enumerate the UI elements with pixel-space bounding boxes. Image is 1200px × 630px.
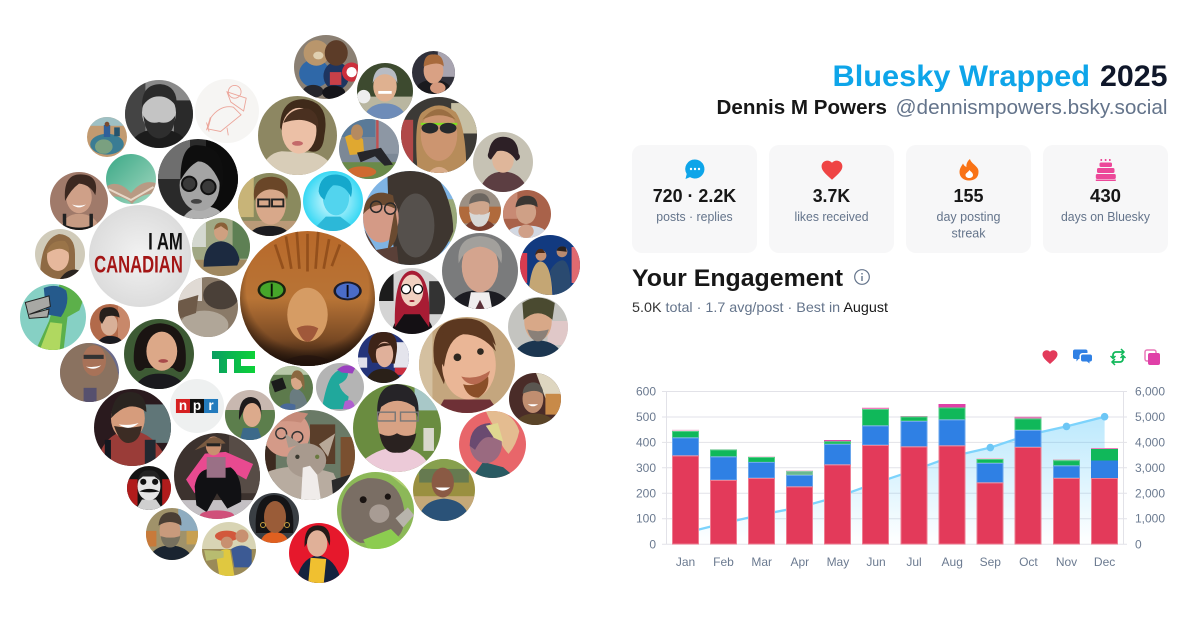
avatar: woman with pony (363, 171, 457, 265)
icon: reposts arrows (1110, 349, 1126, 365)
avatar: man with cat (265, 410, 355, 500)
subtitle: name and handle: Dennis M Powers (716, 97, 887, 119)
avatar: NPR logo: n (179, 398, 187, 413)
bar: Nov (1053, 459, 1080, 544)
avatar: red line sketch (195, 79, 259, 143)
bar: Sep (976, 458, 1004, 544)
avatar: open book (106, 154, 156, 204)
left axis labels: 600 (636, 384, 656, 398)
avatar: smiling woman with dark hair (50, 172, 108, 230)
month labels: Sep (980, 555, 1001, 569)
avatar: man with goatee making a face (419, 317, 515, 413)
avatar: illustrated woman smoking (459, 411, 526, 478)
bar: Dec (1091, 448, 1118, 544)
avatar: black and white mustache art (127, 466, 171, 510)
month labels: Oct (1019, 555, 1038, 569)
avatar: older man with white beard (459, 189, 501, 231)
right axis labels: 0 (1135, 537, 1142, 551)
panel: day posting streak: streak (952, 226, 986, 240)
bars: replies, likes, reposts, quotes by month (672, 404, 1118, 544)
avatar: man smiling outdoors in blue shirt (413, 459, 475, 521)
avatar: woman with brown curly hair (258, 96, 337, 175)
panel: likes received: likes received (794, 210, 869, 224)
icon: speech bubble (685, 159, 704, 179)
avatar: man with grey beard in classroom (146, 508, 198, 560)
avatar: big orange cat (240, 231, 375, 366)
avatar: woman in dark cloche hat (473, 132, 533, 192)
month labels (676, 555, 1115, 569)
bar: May (824, 440, 851, 544)
panel: days on Bluesky: 430 (1090, 186, 1121, 206)
avatar: older man in suit (442, 233, 518, 309)
panel: day posting streak: 155 (954, 186, 984, 206)
heading: Your Engagement: Your Engagement (632, 265, 843, 292)
left axis labels: 300 (636, 461, 656, 475)
right axis labels: 1,000 (1135, 512, 1165, 526)
avatar: woman with US flag background (358, 332, 409, 383)
avatar: woman on red background (289, 523, 349, 583)
bar: Oct (1014, 417, 1042, 544)
avatar: group photo with mushroom hat (202, 522, 256, 576)
bar: Feb (710, 449, 737, 544)
icon: replies bubbles (1073, 350, 1092, 364)
avatar: couple with US flags (520, 235, 580, 295)
cumulative area (686, 417, 1105, 544)
avatar: woman reading book in tree (269, 366, 313, 410)
avatar: blonde woman selfie (35, 229, 85, 279)
panel: posts and replies: 720 · 2.2K (653, 186, 736, 206)
title: 2025 (1100, 60, 1168, 93)
avatar: bearded man in greyscale (125, 80, 193, 148)
icon: likes heart (1042, 350, 1058, 364)
avatar: woman with glasses gold earrings (249, 493, 299, 543)
avatar: cyan cartoon portrait (303, 171, 363, 231)
avatar: woman with dark hair against foliage (124, 319, 194, 389)
avatar: man on deck (192, 218, 250, 276)
month labels: Dec (1094, 555, 1115, 569)
right axis labels: 4,000 (1135, 435, 1165, 449)
avatar: woman with glasses greyscale (158, 139, 238, 219)
panel: days on Bluesky (1043, 145, 1168, 253)
avatar: ginger man with hand on chin (412, 51, 455, 94)
avatar: person with glasses and brick wall (90, 304, 130, 344)
avatar: man thinking against brick (503, 190, 551, 238)
month labels: Jan (676, 555, 695, 569)
avatar: NPR logo (170, 379, 224, 433)
right axis labels (1135, 384, 1165, 551)
left axis labels: 0 (649, 537, 656, 551)
avatar: I AM CANADIAN (89, 205, 191, 307)
icon: cake (1096, 159, 1116, 181)
left axis labels: 400 (636, 435, 656, 449)
avatar: man in red hoodie (94, 389, 171, 466)
avatar: man in car smiling (509, 373, 561, 425)
month labels: Nov (1056, 555, 1077, 569)
avatar: wombat illustration (337, 472, 414, 549)
month labels: Apr (790, 555, 809, 569)
panel: likes received: 3.7K (813, 186, 850, 206)
avatar: smiling older man (357, 63, 413, 119)
left axis labels: 500 (636, 410, 656, 424)
avatar: blue dragon (20, 284, 86, 350)
right axis labels: 6,000 (1135, 384, 1165, 398)
right axis labels: 5,000 (1135, 410, 1165, 424)
avatar: woman in yellow sitting outdoors (339, 119, 399, 179)
avatar: teddy bears (294, 35, 358, 99)
title: Bluesky Wrapped (832, 60, 1090, 93)
avatar: woman with brown scarf (60, 343, 119, 402)
legend icons (1042, 349, 1160, 365)
panel: posts and replies: posts · replies (656, 210, 733, 224)
left axis labels: 100 (636, 512, 656, 526)
panel: day posting streak (906, 145, 1031, 253)
avatar: man with beard and glasses (353, 384, 441, 472)
avatar: teal dinosaur illustration (316, 363, 364, 411)
panel: day posting streak: day posting (936, 210, 1001, 224)
panel: days on Bluesky: days on Bluesky (1061, 210, 1151, 224)
month labels: Jul (906, 555, 922, 569)
avatar: man with glasses, curly hair (238, 173, 301, 236)
avatar: woman with green sunglasses (401, 97, 477, 173)
subtitle: name and handle (716, 97, 1168, 119)
icon: heart (822, 161, 842, 180)
month labels: Feb (713, 555, 734, 569)
avatar: goth illustration woman (379, 268, 445, 334)
month labels: Mar (751, 555, 772, 569)
left axis labels (636, 384, 656, 551)
left axis labels: 200 (636, 486, 656, 500)
cumulative line (686, 413, 1108, 533)
bar: Mar (748, 456, 775, 544)
avatar: man in beanie (508, 297, 568, 357)
panel: likes received (769, 145, 894, 253)
subtitle: name and handle: @dennismpowers.bsky.social (896, 97, 1168, 119)
month labels: May (827, 555, 849, 569)
icon: flame (960, 159, 979, 180)
bar: Jun (862, 408, 889, 544)
bar: Apr (786, 470, 813, 544)
right axis labels: 3,000 (1135, 461, 1165, 475)
avatar: peacock art (87, 117, 127, 157)
bar: Jan (672, 430, 699, 544)
bar: Aug (938, 404, 966, 544)
avatar: woman with landscape (225, 390, 275, 440)
icon: info (855, 270, 869, 284)
bar: Jul (900, 416, 928, 544)
icon: quotes (1145, 350, 1160, 365)
text: engagement summary: 5.0K total · 1.7 avg/post · Best in August (632, 299, 888, 315)
panel: posts and replies (632, 145, 757, 253)
month labels: Jun (866, 555, 886, 569)
avatar: NPR logo: p (193, 398, 201, 413)
chart: monthly engagement stacked bars with cumulative line (636, 384, 1165, 569)
logo: TechCrunch TC (212, 351, 255, 373)
avatar: NPR logo: r (208, 398, 214, 413)
right axis labels: 2,000 (1135, 486, 1165, 500)
avatar: woman in pink jacket (174, 433, 260, 519)
month labels: Aug (942, 555, 963, 569)
avatar: cat-like furry animal (178, 277, 238, 337)
